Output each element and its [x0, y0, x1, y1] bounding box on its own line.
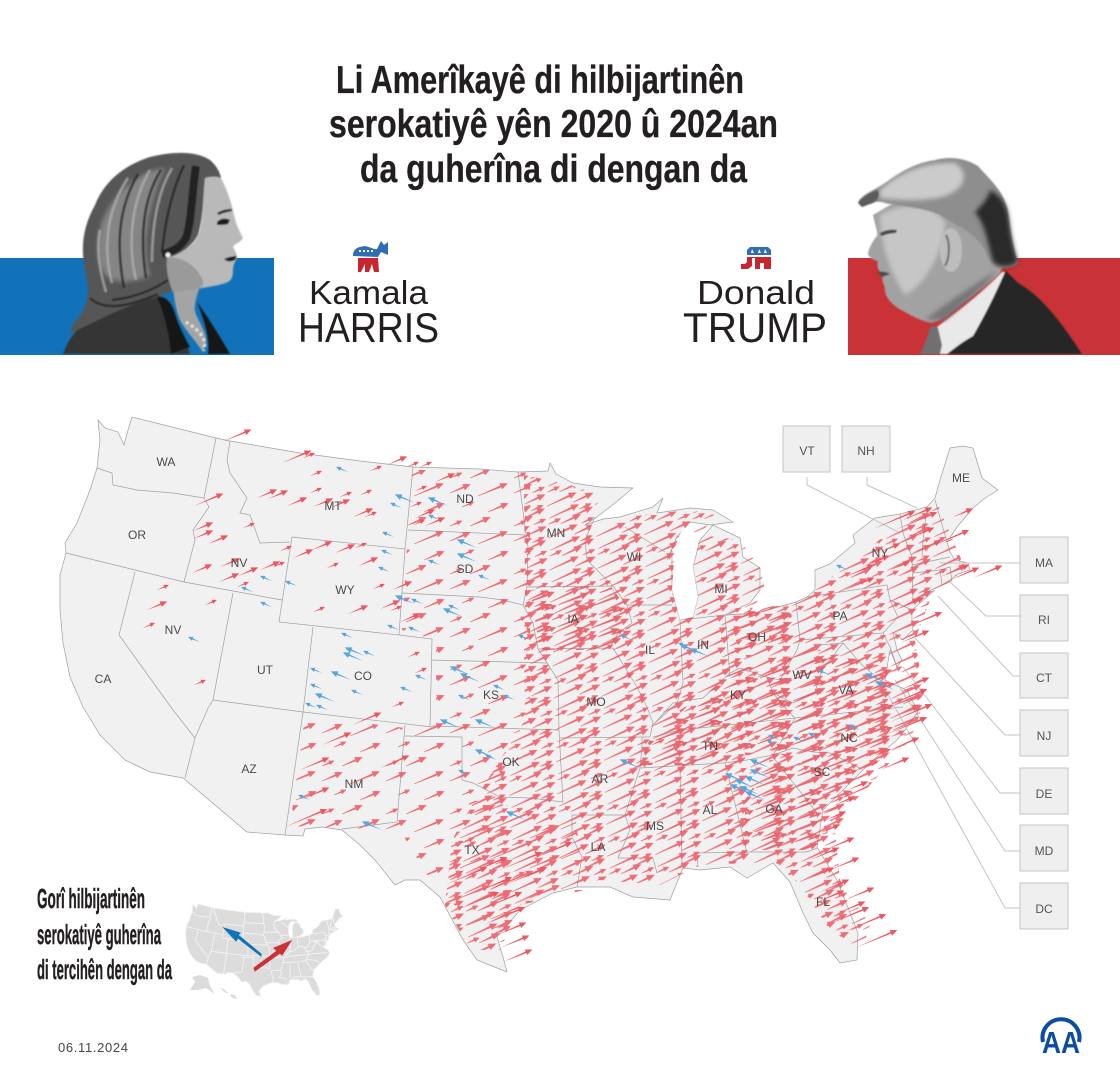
- state labels: OR: [128, 528, 146, 542]
- callout boxes: small northeastern states: [783, 426, 1068, 929]
- state labels: IL: [645, 643, 655, 657]
- state labels: OH: [748, 630, 766, 644]
- Texas and Gulf: [457, 892, 499, 910]
- state labels: ME: [952, 471, 970, 485]
- portrait: Donald Trump: [858, 158, 1082, 354]
- state labels: SC: [814, 765, 831, 779]
- state labels: MN: [547, 526, 565, 540]
- arrow field: plains sparse layer: [290, 470, 530, 880]
- title: Li Amerîkayê di hilbijartinên: [336, 59, 744, 102]
- panel: Harris colour band: [0, 258, 274, 355]
- state labels: LA: [591, 840, 605, 854]
- state labels: TX: [464, 843, 480, 857]
- callout labels: NH: [857, 444, 875, 458]
- callout labels: VT: [799, 444, 815, 458]
- state labels: IN: [697, 638, 709, 652]
- state labels: MI: [714, 582, 728, 596]
- state labels: NY: [872, 546, 888, 560]
- state labels: FL: [816, 895, 830, 909]
- arrow field: eastern mid layer: [445, 475, 965, 950]
- legend heading: serokatiyê guherîna: [37, 919, 161, 950]
- logo: Anadolu Agency: AA: [1042, 1025, 1080, 1060]
- map feature: Lake Michigan: [672, 527, 700, 620]
- arrow field: central dense layer: [530, 585, 925, 850]
- title: serokatiyê yên 2020 û 2024an: [329, 103, 778, 146]
- callout labels: [799, 444, 1054, 916]
- candidate name: Kamala Harris: Kamala: [309, 274, 429, 311]
- panel: Trump colour band: [848, 258, 1120, 355]
- candidate name: Kamala Harris: [298, 274, 439, 351]
- state labels: PA: [832, 609, 848, 623]
- state labels: KY: [730, 688, 746, 702]
- arrows: blue counter-shift arrows: [188, 467, 895, 830]
- candidate name: Donald Trump: [683, 274, 827, 351]
- state labels: MO: [586, 695, 606, 709]
- arrow: red rightward shift: [254, 941, 291, 971]
- callout labels: CT: [1036, 671, 1053, 685]
- callout labels: RI: [1038, 613, 1050, 627]
- state labels: NV: [165, 623, 181, 637]
- state labels: WV: [792, 668, 812, 682]
- state labels: UT: [257, 663, 274, 677]
- Northeast: [873, 511, 915, 529]
- candidate name: Donald Trump: Donald: [697, 274, 815, 311]
- callout labels: MA: [1035, 556, 1053, 570]
- state labels: AZ: [241, 762, 257, 776]
- state labels: WI: [627, 550, 641, 564]
- state labels: OK: [502, 755, 520, 769]
- callout labels: NJ: [1037, 729, 1051, 743]
- callout labels: DC: [1035, 902, 1053, 916]
- text: di tercihên dengan da: [37, 954, 172, 985]
- arrow field: Texas long arrows: [445, 800, 585, 945]
- state labels: AR: [592, 772, 609, 786]
- icon: Republican elephant: [741, 247, 771, 269]
- state labels: NV: [231, 556, 247, 570]
- state labels: KS: [483, 688, 499, 702]
- state labels: GA: [765, 802, 783, 816]
- portrait: Kamala Harris: [63, 153, 243, 354]
- state labels: IA: [567, 612, 579, 626]
- title: [329, 59, 778, 191]
- state labels: VA: [838, 683, 854, 697]
- state labels: MT: [324, 499, 342, 513]
- state labels: [95, 455, 970, 909]
- candidate name: Kamala Harris: HARRIS: [298, 304, 439, 351]
- map: United States state outlines: [60, 417, 998, 972]
- state labels: WA: [157, 455, 175, 469]
- state labels: SD: [457, 562, 474, 576]
- Florida and Atlantic: [855, 930, 897, 948]
- legend heading: Gorî hilbijartinên: [37, 883, 145, 914]
- legend heading: [37, 883, 172, 985]
- icon: Democratic donkey: [353, 241, 388, 272]
- callout labels: DE: [1036, 787, 1052, 801]
- state labels: MS: [646, 819, 664, 833]
- New Mexico and west Texas: [285, 809, 327, 827]
- arrows: individual red arrows: [143, 430, 1002, 962]
- state labels: CO: [354, 669, 372, 683]
- arrows: dense red vote shift field: [290, 470, 965, 950]
- state labels: AL: [703, 803, 718, 817]
- state labels: ND: [456, 492, 474, 506]
- state labels: CA: [95, 672, 111, 686]
- candidate name: Donald Trump: TRUMP: [683, 304, 827, 351]
- arrow: blue leftward shift: [224, 928, 261, 956]
- state labels: NM: [345, 777, 363, 791]
- callout leader lines: [807, 477, 1020, 908]
- state labels: TN: [702, 739, 718, 753]
- legend map with direction arrows: [186, 904, 343, 999]
- state labels: NC: [840, 731, 858, 745]
- title: da guherîna di dengan da: [360, 148, 747, 191]
- state labels: WY: [335, 583, 355, 597]
- callout labels: MD: [1035, 844, 1054, 858]
- date: 06.11.2024: [58, 1040, 128, 1055]
